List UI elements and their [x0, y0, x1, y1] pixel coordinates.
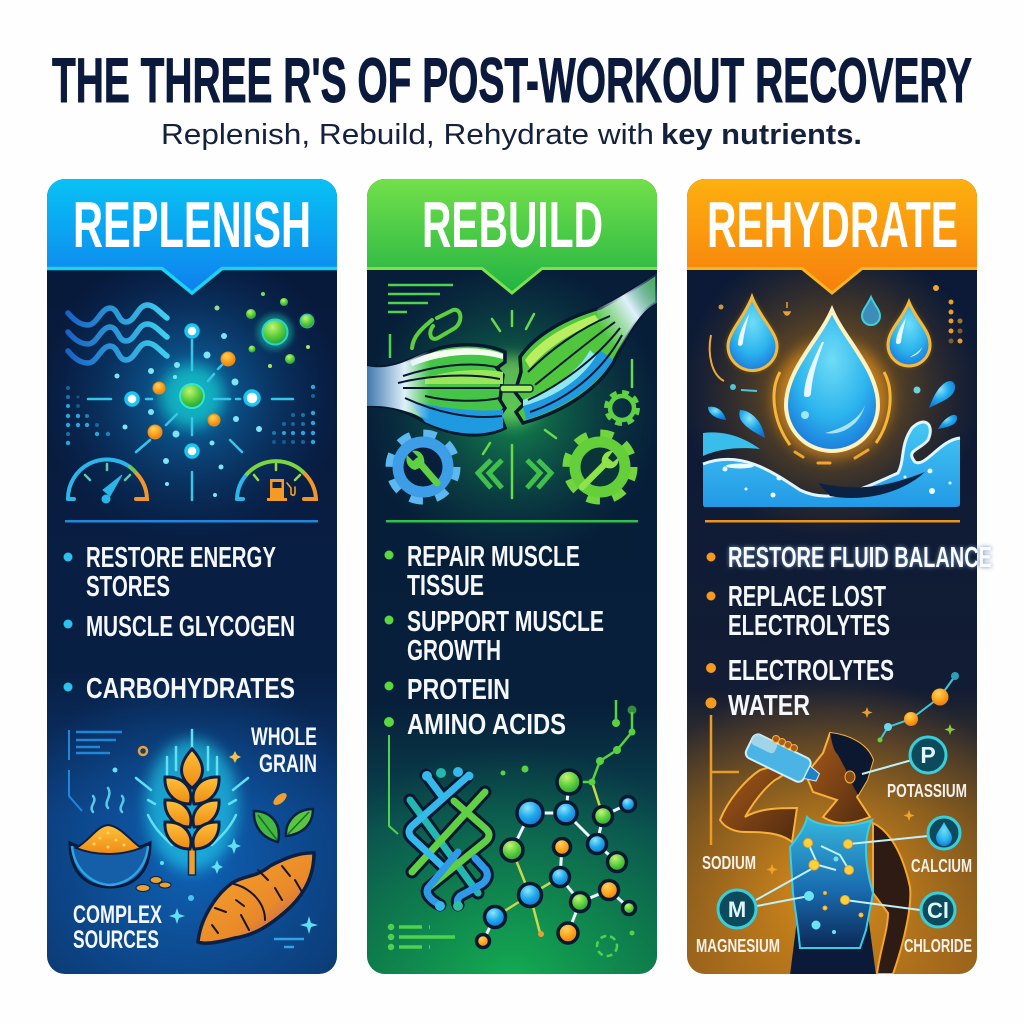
molecules: green — [214, 292, 314, 368]
element: potassium: POTASSIUM — [887, 781, 967, 801]
muscle left — [367, 345, 505, 435]
icon: chain link — [412, 310, 460, 348]
sparkles — [112, 747, 318, 947]
element: magnesium: MAGNESIUM — [696, 936, 780, 956]
header: rehydrate — [687, 179, 977, 293]
bullet list: rebuild: TISSUE — [407, 570, 484, 602]
header: rebuild: REBUILD — [422, 188, 603, 261]
bullet list: rehydrate — [706, 552, 894, 722]
divider — [705, 520, 960, 522]
bullet list: replenish — [64, 542, 295, 705]
energy network — [88, 325, 293, 500]
figure: athlete drinking — [720, 732, 910, 975]
element: calcium — [911, 817, 972, 876]
header: rebuild — [367, 179, 657, 293]
muscle illustration — [367, 273, 657, 435]
bullet list: replenish: STORES — [86, 571, 170, 603]
bullet list: rebuild — [384, 541, 604, 741]
icon: protein helix — [409, 767, 489, 911]
spark lines — [483, 311, 632, 498]
dashed ring — [597, 936, 617, 956]
header: replenish — [47, 179, 337, 293]
label: complex sources: COMPLEX — [73, 901, 162, 929]
label: complex sources — [74, 905, 162, 948]
element: sodium: SODIUM — [702, 853, 756, 873]
icon: main water drop — [774, 310, 890, 463]
icon: sweet potato — [198, 853, 314, 943]
element: chloride — [904, 893, 972, 956]
divider — [386, 520, 638, 522]
ear — [845, 771, 855, 783]
icon: waves — [68, 305, 167, 363]
icon: wheat — [136, 730, 248, 875]
bullet list: rehydrate: ELECTROLYTES — [728, 655, 894, 687]
bullet list: rebuild: AMINO ACIDS — [407, 709, 566, 741]
element: magnesium: M — [728, 897, 746, 922]
bullet list: rebuild: PROTEIN — [407, 674, 510, 706]
element: calcium: CALCIUM — [911, 856, 972, 876]
molecule chain — [766, 672, 959, 875]
label: whole grain: GRAIN — [259, 750, 317, 778]
label: complex sources: SOURCES — [73, 926, 159, 954]
head and neck — [808, 733, 873, 823]
label: whole grain — [251, 727, 316, 772]
right arm — [873, 823, 910, 974]
icon: right drop — [888, 302, 930, 366]
panel: rebuild — [367, 179, 657, 974]
element: potassium: P — [920, 742, 936, 768]
icon: splash droplets — [708, 381, 957, 438]
bullet list: replenish: MUSCLE GLYCOGEN — [86, 611, 295, 643]
subtitle: Replenish, Rebuild, Rehydrate with — [161, 119, 654, 151]
icon: bowl of grains — [70, 788, 171, 892]
element: potassium — [887, 737, 967, 801]
bullet list: rebuild: REPAIR MUSCLE — [407, 541, 580, 573]
text lines icon — [388, 285, 453, 358]
subtitle: key nutrients. — [661, 119, 862, 151]
bullet list: replenish: RESTORE ENERGY — [86, 542, 276, 574]
bullet list: rebuild: SUPPORT MUSCLE — [407, 606, 604, 638]
hair — [830, 733, 873, 795]
legend lines — [390, 926, 455, 948]
icon: blue gear with wrench — [390, 434, 456, 500]
tank top — [790, 817, 873, 948]
element: magnesium — [696, 890, 780, 956]
header: replenish: REPLENISH — [73, 188, 311, 261]
icon: double chevrons — [478, 460, 551, 488]
panel: replenish — [47, 179, 337, 974]
bottle — [744, 732, 823, 789]
muscle right — [515, 273, 657, 423]
bullet list: rehydrate: WATER — [728, 690, 810, 722]
icon: green gear with wrench — [567, 434, 633, 500]
guide line — [389, 735, 398, 834]
dot matrix — [66, 385, 315, 445]
shorts — [790, 915, 876, 975]
bullet list: rehydrate: REPLACE LOST — [728, 581, 886, 613]
fingers — [772, 736, 798, 752]
subtitle — [161, 119, 862, 151]
raised arm — [720, 762, 797, 842]
icon: circuit lines — [69, 730, 122, 811]
panel: rehydrate — [687, 179, 977, 975]
icon: water wave — [703, 422, 960, 507]
icon: small drop — [862, 297, 880, 325]
icon: gauge left — [68, 459, 147, 503]
icon: small gear — [607, 393, 637, 423]
molecule network — [476, 700, 636, 948]
bullet list: replenish: CARBOHYDRATES — [86, 673, 295, 705]
bullet list: rehydrate: ELECTROLYTES — [728, 610, 890, 642]
element: chloride: Cl — [927, 898, 949, 923]
icon: left drop — [728, 297, 777, 370]
guide line — [711, 715, 739, 845]
icon: leaves — [254, 791, 313, 842]
bullet list: rebuild: GROWTH — [407, 635, 501, 667]
electrolyte connections — [756, 760, 928, 934]
decorative dots and arcs — [710, 285, 962, 394]
label: whole grain: WHOLE — [251, 723, 317, 751]
icon: gauge with fuel pump — [237, 461, 316, 501]
divider — [65, 520, 318, 522]
element: chloride: CHLORIDE — [904, 936, 972, 956]
